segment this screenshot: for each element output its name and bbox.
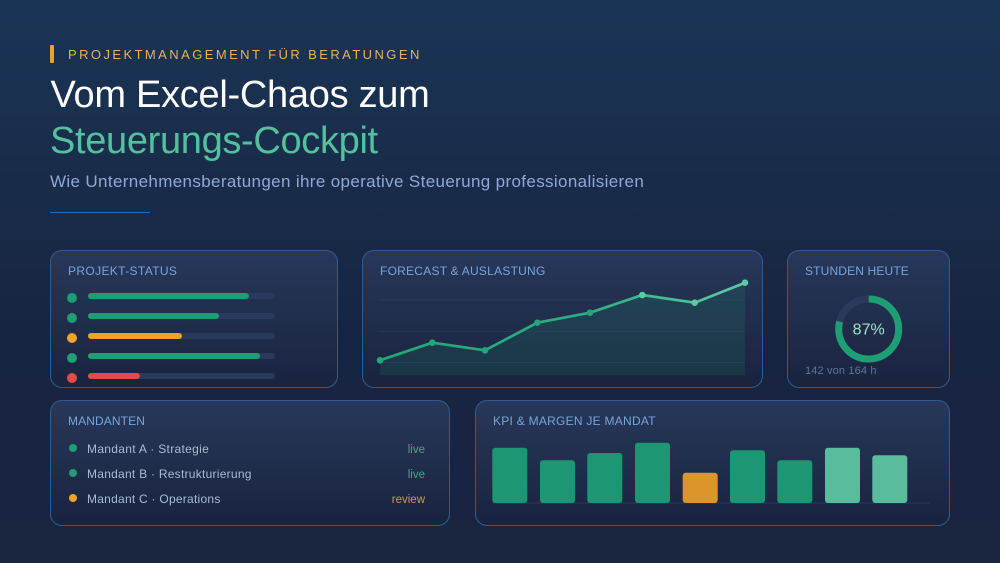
panel: Projekt-Status [50, 250, 338, 388]
client row A: Mandant A · Strategie [87, 442, 209, 456]
donut gauge [835, 296, 902, 362]
heading: KPI: KPI & MARGEN JE MANDAT [493, 414, 656, 428]
client row B: Mandant B · Restrukturierung [87, 467, 252, 481]
client row C [69, 492, 425, 506]
client row A [69, 442, 425, 456]
divider [50, 212, 150, 213]
eyebrow accent bar [50, 45, 54, 63]
client row B [69, 467, 425, 481]
heading: Projekt-Status: PROJEKT-STATUS [68, 264, 177, 278]
subtitle: Wie Unternehmensberatungen ihre operative Steuerung professionalisieren [50, 172, 644, 191]
client row C: Mandant C · Operations [87, 492, 221, 506]
client row B: live [408, 469, 425, 481]
donut gauge: 87% [853, 322, 885, 339]
bar chart [492, 442, 930, 504]
panel: KPI & Margen [475, 400, 950, 526]
line chart [376, 279, 748, 375]
heading: Mandanten: MANDANTEN [68, 414, 145, 428]
client row C: review [392, 494, 425, 506]
panel: Mandanten [50, 400, 450, 526]
hours caption: 142 von 164 h [805, 365, 877, 377]
heading: Stunden: STUNDEN HEUTE [805, 264, 909, 278]
panel: Stunden heute [787, 250, 950, 388]
heading: Forecast: FORECAST & AUSLASTUNG [380, 264, 546, 278]
title line 2: Steuerungs-Cockpit [50, 120, 378, 162]
panel: Forecast & Auslastung [362, 250, 763, 388]
title line 1: Vom Excel-Chaos zum [50, 74, 430, 116]
eyebrow: PROJEKTMANAGEMENT FÜR BERATUNGEN [68, 47, 422, 62]
client row A: live [408, 444, 425, 456]
status rows [67, 293, 275, 383]
